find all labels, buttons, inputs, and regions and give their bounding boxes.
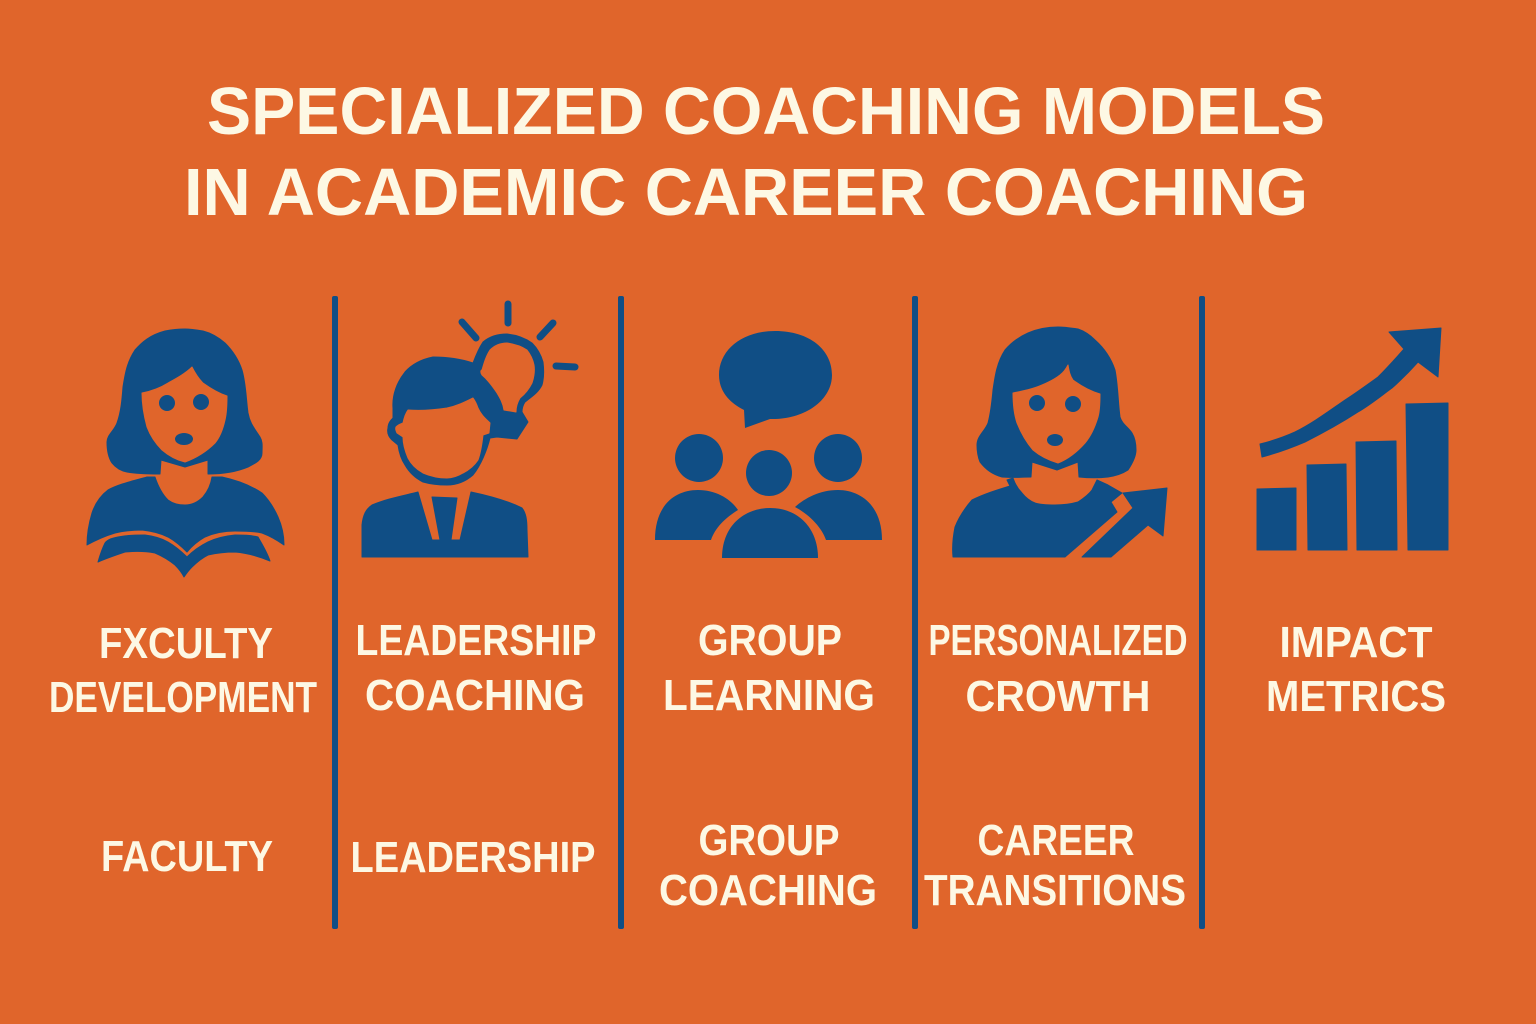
label: group coaching: COACHING <box>659 866 877 915</box>
label: leadership coaching: LEADERSHIP <box>356 616 596 665</box>
icon: impact bar chart with arrow <box>1257 328 1448 550</box>
icon: faculty woman with book <box>87 329 284 577</box>
label: group learning: LEARNING <box>663 671 875 720</box>
title: IN ACADEMIC CAREER COACHING <box>184 155 1308 230</box>
label: faculty: FACULTY <box>101 832 273 881</box>
label: personalized growth: PERSONALIZED <box>928 616 1188 665</box>
label: impact metrics <box>1266 618 1446 721</box>
label: faculty development: DEVELOPMENT <box>49 673 317 722</box>
title <box>184 74 1325 230</box>
column dividers <box>332 296 1205 929</box>
label: leadership: LEADERSHIP <box>350 833 596 882</box>
icon: leadership person with lightbulb <box>362 304 575 557</box>
label: personalized growth: CROWTH <box>966 672 1150 721</box>
label: personalized growth <box>928 616 1188 721</box>
label: career transitions: TRANSITIONS <box>924 866 1186 915</box>
icon: personalized growth woman with arrow <box>953 327 1167 557</box>
title: SPECIALIZED COACHING MODELS <box>207 74 1325 149</box>
label: group coaching <box>659 816 877 915</box>
label: group learning: GROUP <box>698 616 842 665</box>
icon: group with speech bubble <box>655 331 882 558</box>
label: faculty development <box>49 619 317 722</box>
label: impact metrics: IMPACT <box>1280 618 1433 667</box>
label: group learning <box>663 616 875 720</box>
label: career transitions: CAREER <box>978 816 1134 865</box>
label: faculty development: FXCULTY <box>99 619 273 668</box>
label: career transitions <box>924 816 1186 915</box>
label: group coaching: GROUP <box>698 816 840 865</box>
label: leadership coaching <box>356 616 596 720</box>
label: leadership coaching: COACHING <box>365 671 585 720</box>
label: impact metrics: METRICS <box>1266 672 1446 721</box>
